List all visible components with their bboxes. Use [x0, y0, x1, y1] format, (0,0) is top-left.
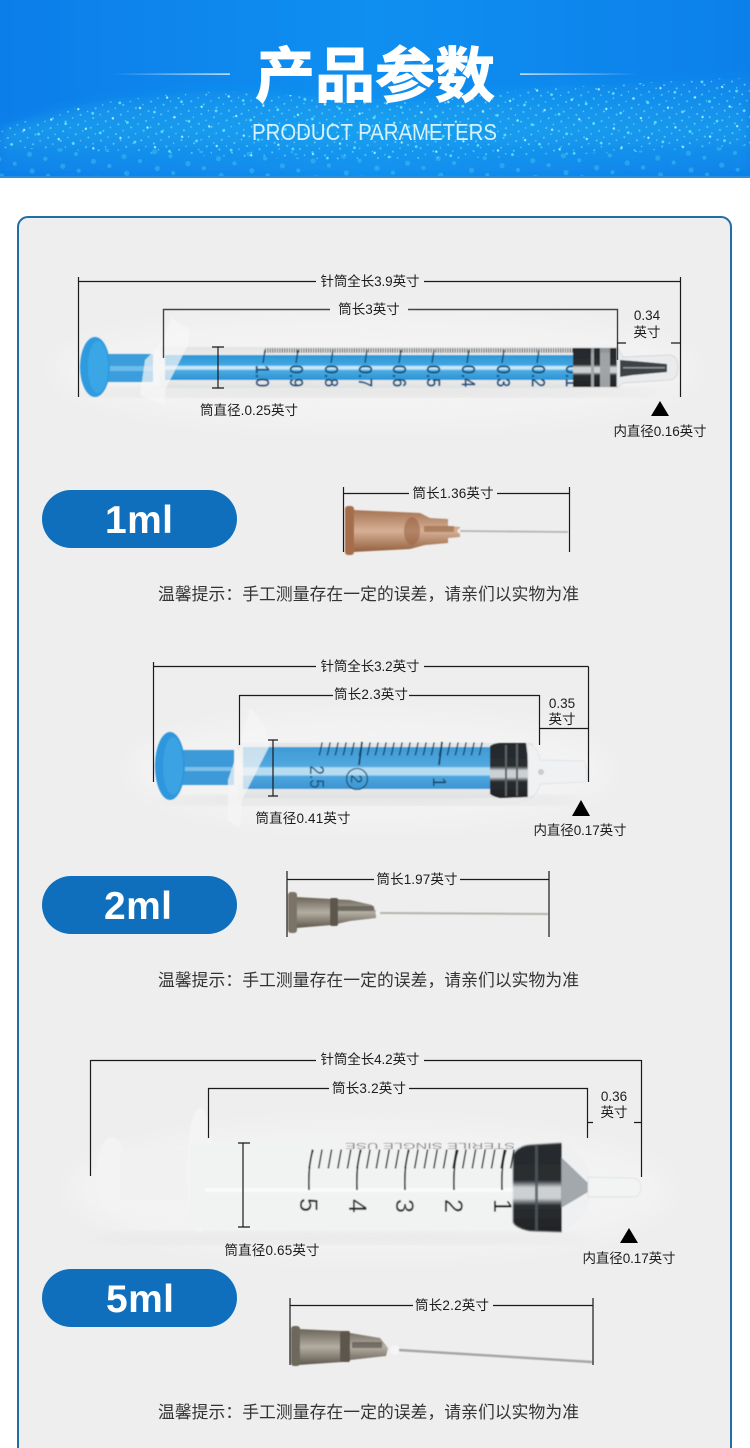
overall length 1ml: 针筒全长3.9英寸 [320, 273, 420, 289]
2ml syringe: 2 [347, 775, 364, 784]
5ml syringe [90, 1108, 641, 1244]
barrel diameter 5ml: 筒直径0.65英寸 [224, 1242, 320, 1258]
particle wave [0, 78, 750, 176]
5ml syringe: 2 [439, 1199, 467, 1213]
1ml pill [42, 490, 237, 548]
subtitle: PRODUCT PARAMETERS [252, 119, 497, 145]
2ml syringe: 1 [429, 777, 449, 787]
overall length 5ml: 针筒全长4.2英寸 [320, 1051, 420, 1067]
overall length 2ml: 针筒全长3.2英寸 [320, 658, 420, 674]
1ml syringe: 0.3 [493, 365, 513, 387]
tip length 1ml [617, 308, 680, 343]
tip length 2ml [539, 696, 588, 728]
tip length 5ml: 英寸 [600, 1104, 628, 1120]
inner diameter 5ml [582, 1228, 676, 1266]
5ml note: 温馨提示：手工测量存在一定的误差，请亲们以实物为准 [158, 1403, 579, 1422]
tip length 1ml: 0.34 [634, 308, 661, 323]
2ml syringe: 2.5 [305, 766, 327, 788]
header rule right [520, 74, 638, 75]
tip length 1ml: 英寸 [634, 324, 660, 340]
barrel diameter 5ml [224, 1143, 320, 1258]
1ml needle: 筒长1.36英寸 [412, 485, 494, 501]
1ml syringe: 0.1 [562, 365, 582, 387]
header banner [0, 0, 750, 177]
2ml pill: 2ml [104, 885, 172, 928]
title: 产品参数 [255, 43, 495, 110]
5ml syringe: 3 [390, 1199, 418, 1213]
barrel diameter 1ml: 筒直径.0.25英寸 [200, 402, 298, 418]
1ml pill: 1ml [105, 499, 173, 542]
2ml section [42, 658, 626, 990]
1ml syringe: 0.2 [528, 365, 548, 387]
tip length 2ml: 0.35 [549, 696, 575, 711]
barrel length 2ml: 筒长2.3英寸 [334, 686, 408, 702]
inner diameter 2ml [534, 800, 626, 838]
1ml syringe: 0.9 [286, 365, 306, 387]
inner diameter 1ml [614, 401, 706, 439]
5ml syringe: 5 [294, 1198, 322, 1212]
5ml syringe: 4 [343, 1199, 371, 1213]
1ml syringe [80, 318, 678, 405]
header bottom edge [0, 176, 750, 178]
barrel length 1ml: 筒长3英寸 [338, 301, 400, 317]
5ml syringe: STERILE SINGLE USE [345, 1141, 515, 1150]
overall length 5ml [90, 1051, 642, 1177]
2ml note: 温馨提示：手工测量存在一定的误差，请亲们以实物为准 [158, 971, 579, 990]
inner diameter 2ml: 内直径0.17英寸 [534, 822, 626, 838]
barrel length 5ml [208, 1080, 588, 1138]
5ml section [42, 1051, 676, 1422]
1ml syringe: 0.5 [423, 365, 443, 387]
barrel length 2ml [240, 686, 540, 745]
1ml syringe: 0.8 [321, 365, 341, 387]
2ml needle: 筒长1.97英寸 [376, 871, 458, 887]
overall length 2ml [154, 658, 588, 782]
tip length 5ml [587, 1089, 641, 1122]
barrel diameter 2ml [256, 740, 350, 826]
barrel length 1ml [164, 301, 618, 360]
5ml syringe: 1 [488, 1199, 516, 1213]
1ml syringe: 0.6 [389, 365, 409, 387]
overall length 1ml [78, 273, 680, 397]
2ml needle [287, 871, 549, 937]
5ml pill: 5ml [106, 1278, 174, 1321]
2ml pill [42, 876, 237, 934]
tip length 5ml: 0.36 [601, 1089, 627, 1104]
inner diameter 5ml: 内直径0.17英寸 [582, 1250, 676, 1266]
barrel length 5ml: 筒长3.2英寸 [332, 1080, 406, 1096]
1ml syringe: 1.0 [252, 365, 272, 387]
5ml needle [290, 1297, 593, 1366]
inner diameter 1ml: 内直径0.16英寸 [614, 423, 706, 439]
1ml note: 温馨提示：手工测量存在一定的误差，请亲们以实物为准 [158, 585, 579, 604]
barrel diameter 2ml: 筒直径0.41英寸 [256, 810, 350, 826]
5ml pill [42, 1269, 237, 1327]
5ml needle: 筒长2.2英寸 [415, 1297, 489, 1313]
tip length 2ml: 英寸 [548, 711, 576, 727]
header rule left [112, 74, 230, 75]
2ml syringe [155, 708, 587, 828]
1ml section [42, 273, 706, 604]
1ml needle [344, 485, 570, 555]
1ml syringe: 0.7 [355, 365, 375, 387]
barrel diameter 1ml [200, 347, 298, 418]
1ml syringe: 0.4 [458, 365, 478, 387]
